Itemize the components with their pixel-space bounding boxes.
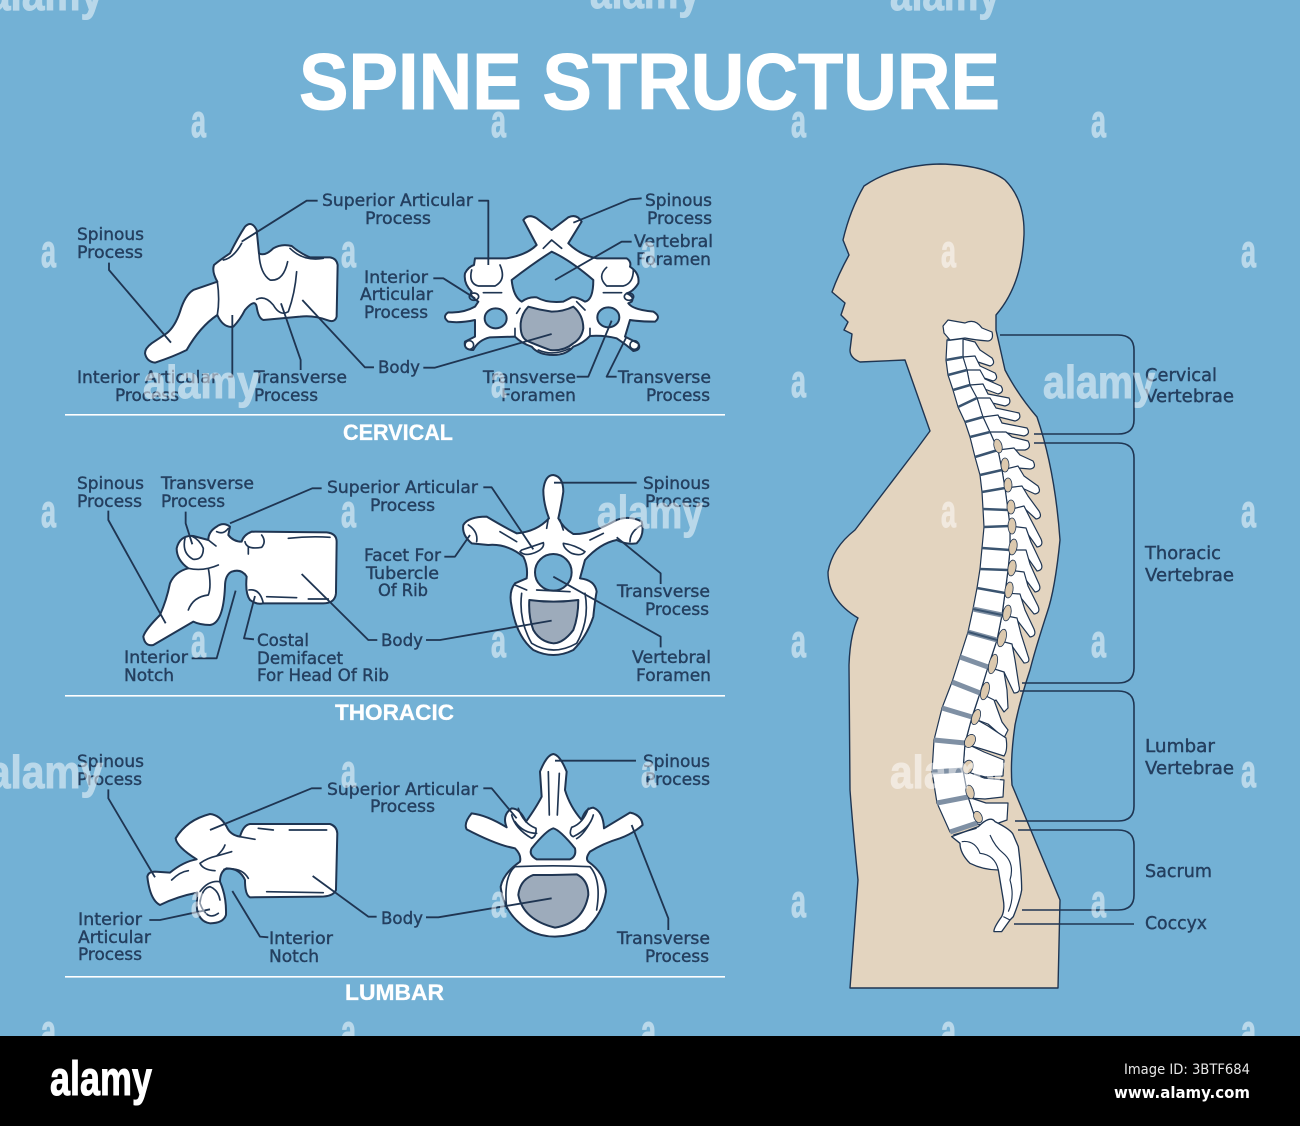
label: transverse process top view: Process: [645, 600, 709, 619]
watermark pattern: a: [641, 745, 656, 797]
label: spinous process top view: Spinous: [645, 191, 712, 210]
label: vertebral foramen: Foramen: [636, 250, 711, 269]
label: costal demifacet: Costal: [257, 631, 309, 650]
label: spinous process top view: Spinous: [643, 752, 710, 771]
label: vertebral foramen: Vertebral: [634, 232, 713, 251]
label: thoracic vertebrae: Vertebrae: [1145, 566, 1234, 586]
label: transverse process: Process: [161, 492, 225, 511]
label: interior notch: Notch: [269, 947, 319, 966]
watermark pattern: a: [641, 225, 656, 277]
label: facet for tubercle of rib: Of Rib: [378, 581, 428, 600]
label: transverse process top view: Transverse: [616, 582, 710, 601]
illustration: thoracic top view: [426, 475, 661, 655]
spine: vertebral bodies: [932, 320, 1010, 832]
label: spinous process: [77, 474, 144, 511]
label: superior articular process: Process: [370, 797, 435, 816]
spine: atlas vertebra: [943, 320, 992, 341]
bracket: lumbar vertebrae: [1015, 691, 1134, 821]
label: transverse process top view: [616, 582, 710, 619]
label: transverse process: [160, 474, 254, 511]
label: spinous process: [77, 225, 144, 262]
label: facet for tubercle of rib: Facet For: [364, 546, 441, 565]
watermark pattern: a: [791, 875, 806, 927]
footer image id: Image ID: 3BTF684: [1124, 1062, 1250, 1078]
label: facet for tubercle of rib: Tubercle: [365, 564, 439, 583]
label: vertebral foramen: [632, 648, 711, 685]
watermark pattern: a: [1241, 745, 1256, 797]
label: spinous process top view: [643, 752, 710, 789]
label: interior articular process left: Process: [115, 386, 179, 405]
watermark pattern: a: [791, 95, 806, 147]
watermark pattern: a: [491, 95, 506, 147]
label: transverse foramen: Foramen: [501, 386, 576, 405]
label: interior articular process left: Interior Articular: [77, 368, 218, 387]
watermark pattern: alamy: [143, 356, 260, 408]
label: transverse process: [253, 368, 347, 405]
label: spinous process top view: Process: [647, 209, 712, 228]
label: spinous process: [77, 752, 144, 789]
label: interior notch: [269, 929, 333, 966]
label: interior articular process right: [360, 268, 433, 322]
spine: vertebral foramina: [961, 438, 1018, 824]
panel: lumbar vertebra: [77, 752, 710, 966]
label: spinous process: Process: [77, 770, 142, 789]
label: interior articular process right: Interior: [364, 268, 428, 287]
title: SPINE STRUCTURE: [299, 37, 1000, 126]
body silhouette: [828, 164, 1060, 988]
watermark pattern: a: [1241, 485, 1256, 537]
label: lumbar vertebrae: Vertebrae: [1145, 759, 1234, 779]
label: superior articular process: Superior Articular: [327, 780, 478, 799]
heading: thoracic: THORACIC: [335, 700, 454, 725]
watermark pattern: a: [941, 1005, 956, 1057]
label: interior articular process: Process: [78, 945, 142, 964]
watermark pattern: a: [491, 615, 506, 667]
label: facet for tubercle of rib: [364, 546, 441, 600]
heading: cervical: CERVICAL: [343, 420, 453, 445]
panel: body silhouette with spine: [828, 164, 1060, 988]
watermark pattern: a: [791, 355, 806, 407]
label: thoracic vertebrae: [1144, 544, 1234, 586]
watermark pattern: a: [1091, 875, 1106, 927]
bracket: coccyx: [1014, 923, 1134, 925]
label: spinous process top view: Process: [645, 770, 710, 789]
label: spinous process top view: Spinous: [643, 474, 710, 493]
label: vertebral foramen: [634, 232, 713, 269]
bracket: sacrum: [1018, 830, 1134, 910]
label: transverse process: Transverse: [616, 929, 710, 948]
label: interior notch: Interior: [269, 929, 333, 948]
label: superior articular process: Process: [365, 209, 431, 228]
watermark pattern: a: [791, 615, 806, 667]
label: cervical vertebrae: [1145, 366, 1234, 407]
label: superior articular process: [327, 780, 478, 816]
watermark pattern: alamy: [597, 486, 703, 538]
heading: lumbar: LUMBAR: [345, 980, 444, 1005]
label: superior articular process: Superior Articular: [327, 478, 478, 497]
label: costal demifacet: [257, 631, 389, 685]
label: thoracic vertebrae: Thoracic: [1144, 544, 1221, 564]
watermark pattern: a: [641, 1005, 656, 1057]
illustration: thoracic side view: [108, 488, 377, 658]
watermark pattern: a: [41, 485, 56, 537]
watermark pattern: a: [491, 875, 506, 927]
label: interior articular process left: [77, 368, 218, 405]
watermark pattern: a: [491, 355, 506, 407]
label: spinous process: Process: [77, 492, 142, 511]
label: interior articular process: Interior: [78, 910, 142, 929]
illustration: lumbar side view: [108, 788, 377, 937]
label: sacrum: Sacrum: [1145, 862, 1212, 882]
label: spinous process top view: [643, 474, 710, 511]
label: transverse process top view: Process: [646, 386, 710, 405]
label: vertebral foramen: Foramen: [636, 666, 711, 685]
illustration: cervical side view: [109, 201, 374, 377]
watermark pattern: a: [41, 225, 56, 277]
footer url: www.alamy.com: [1114, 1083, 1250, 1102]
label: spinous process: Spinous: [77, 225, 144, 244]
panel: cervical vertebra: [77, 191, 713, 405]
label: transverse process: Process: [645, 947, 709, 966]
label: transverse process: [616, 929, 710, 966]
label: lumbar vertebrae: [1145, 737, 1234, 779]
label: cervical vertebrae: Cervical: [1145, 366, 1217, 386]
watermark pattern: a: [1241, 225, 1256, 277]
watermark pattern: a: [341, 485, 356, 537]
watermark pattern: a: [341, 745, 356, 797]
label: vertebral foramen: Vertebral: [632, 648, 711, 667]
watermark pattern: a: [341, 225, 356, 277]
label: transverse process: Process: [254, 386, 318, 405]
label: spinous process: Spinous: [77, 474, 144, 493]
label: transverse process: Transverse: [253, 368, 347, 387]
watermark pattern: alamy: [890, 746, 1005, 798]
label: spinous process top view: Process: [645, 492, 710, 511]
label: transverse process top view: [617, 368, 711, 405]
footer bar: [0, 1036, 1300, 1126]
label: transverse process: Transverse: [160, 474, 254, 493]
watermark pattern: a: [1091, 95, 1106, 147]
label: interior notch: Notch: [124, 666, 174, 685]
illustration: lumbar top view: [426, 754, 668, 937]
label: spinous process: Process: [77, 243, 143, 262]
label: lumbar vertebrae: Lumbar: [1145, 737, 1216, 757]
watermark pattern: a: [191, 615, 206, 667]
label: transverse foramen: Transverse: [482, 368, 576, 387]
label: cervical vertebrae: Vertebrae: [1145, 387, 1234, 407]
label: transverse foramen: [482, 368, 576, 405]
label: interior notch: Interior: [124, 648, 188, 667]
spine: sacrum and coccyx: [952, 819, 1022, 932]
label: body: Body: [381, 909, 423, 928]
spine: spinous processes: [963, 339, 1042, 826]
label: costal demifacet: For Head Of Rib: [257, 666, 389, 685]
label: body: Body: [381, 631, 423, 650]
bracket: cervical vertebrae: [1000, 335, 1134, 434]
label: costal demifacet: Demifacet: [257, 649, 343, 668]
label: superior articular process: Superior Articular: [322, 191, 473, 210]
watermark pattern: alamy: [1043, 356, 1155, 408]
label: body: Body: [378, 358, 420, 377]
bracket: thoracic vertebrae: [1022, 443, 1134, 683]
watermark pattern: a: [191, 95, 206, 147]
label: interior articular process right: Process: [364, 303, 428, 322]
label: superior articular process: Process: [370, 496, 435, 515]
watermark pattern: a: [941, 225, 956, 277]
watermark pattern: a: [41, 1005, 56, 1057]
watermark pattern: a: [341, 1005, 356, 1057]
illustration: cervical top view: [423, 198, 658, 377]
label: interior articular process: [78, 910, 151, 964]
label: spinous process: Spinous: [77, 752, 144, 771]
watermark pattern: a: [191, 875, 206, 927]
label: superior articular process: [327, 478, 478, 515]
label: transverse process top view: Transverse: [617, 368, 711, 387]
label: spinous process top view: [645, 191, 712, 228]
watermark pattern: a: [1241, 1005, 1256, 1057]
label: coccyx: Coccyx: [1145, 914, 1207, 934]
watermark pattern: a: [1091, 615, 1106, 667]
label: superior articular process: [322, 191, 473, 228]
label: interior notch: [124, 648, 188, 685]
label: interior articular process right: Articular: [360, 285, 433, 304]
label: interior articular process: Articular: [78, 928, 151, 947]
panel: thoracic vertebra: [77, 474, 711, 685]
watermark pattern: a: [941, 485, 956, 537]
footer logo: alamy: [50, 1053, 152, 1106]
